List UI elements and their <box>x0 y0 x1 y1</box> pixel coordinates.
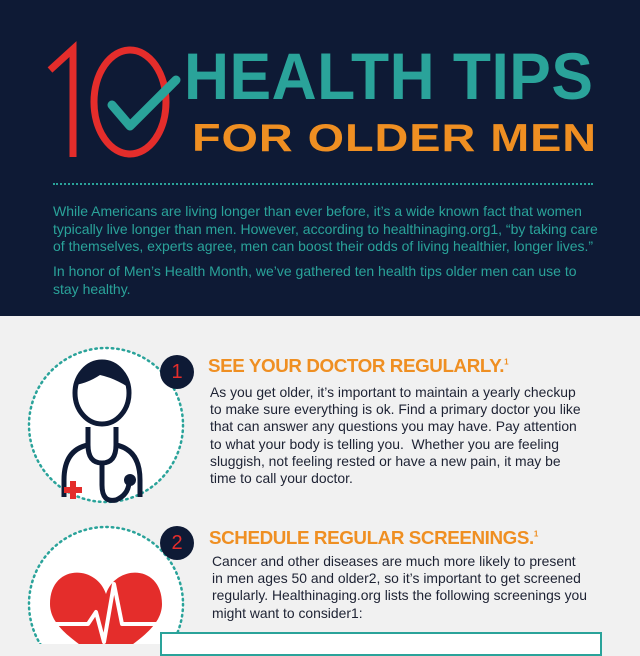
badge 2: 2 <box>171 532 183 554</box>
body 2: might want to consider1: <box>212 605 363 621</box>
body 1: time to call your doctor. <box>210 470 353 486</box>
screenings box <box>160 632 602 656</box>
body 2: in men ages 50 and older2, so it’s important to get screened <box>212 570 581 586</box>
icon: heart <box>28 526 184 644</box>
badge 1 <box>160 355 194 389</box>
body 2: regularly. Healthinaging.org lists the following screenings you <box>212 587 587 603</box>
checkmark <box>112 80 176 126</box>
intro paragraph: typically live longer than men. However, according to healthinaging.org1, “by taking care <box>53 220 598 236</box>
badge 1: 1 <box>171 361 183 383</box>
body 1: that can answer any questions you may have. Pay attention <box>210 418 577 434</box>
body 1 <box>210 384 581 486</box>
body 1: to what your body is telling you. Whether you are feeling <box>210 436 559 452</box>
intro paragraph: While Americans are living longer than ever before, it’s a wide known fact that women <box>53 203 582 219</box>
body 2: Cancer and other diseases are much more likely to present <box>212 553 576 569</box>
title: HEALTH TIPS: HEALTH TIPS <box>184 39 593 113</box>
heading 2: SCHEDULE REGULAR SCREENINGS.1 <box>209 527 538 548</box>
body 1: sluggish, not feeling rested or have a new pain, it may be <box>210 453 561 469</box>
title graphic: 10 with check <box>48 41 180 158</box>
body 2 <box>212 553 587 621</box>
dotted divider <box>53 183 593 185</box>
intro paragraph <box>53 203 598 254</box>
number 10 <box>50 49 166 157</box>
header panel <box>0 0 640 316</box>
subtitle: FOR OLDER MEN: FOR OLDER MEN <box>192 117 597 160</box>
badge 2 <box>160 526 194 560</box>
body 1: As you get older, it’s important to maintain a yearly checkup <box>210 384 576 400</box>
intro paragraph 2: In honor of Men’s Health Month, we’ve gathered ten health tips older men can use to <box>53 263 577 279</box>
heading 1: SEE YOUR DOCTOR REGULARLY.1 <box>208 355 508 376</box>
intro paragraph: of themselves, experts agree, men can boost their odds of living healthier, longer lives.” <box>53 238 593 254</box>
icon: doctor <box>28 346 184 504</box>
body 1: to make sure everything is ok. Find a primary doctor you like <box>210 401 581 417</box>
intro paragraph 2 <box>53 263 577 297</box>
intro paragraph 2: stay healthy. <box>53 280 131 296</box>
